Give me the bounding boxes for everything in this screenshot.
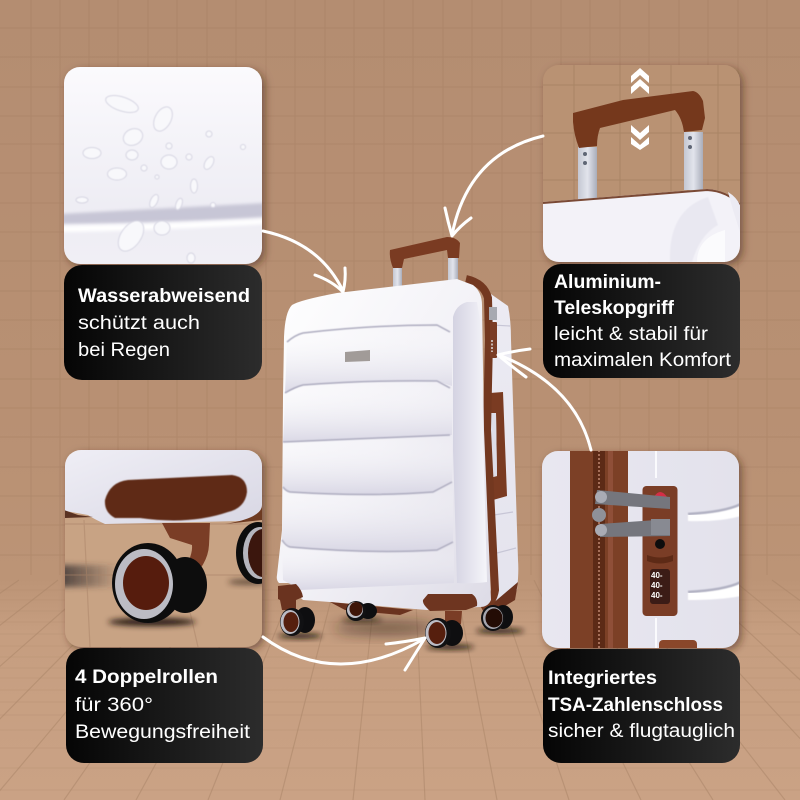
text box: aluminium-teleskopgriff: maximalen Komfort bbox=[554, 350, 732, 371]
text box: wasserabweisend: schützt auch bbox=[78, 313, 200, 334]
panel: tsa-zahlenschloss bbox=[542, 450, 741, 763]
photo: TSA combination lock: 40- bbox=[651, 571, 663, 580]
photo: TSA combination lock: 40- bbox=[651, 591, 663, 600]
text box: aluminium-teleskopgriff: leicht & stabil für bbox=[554, 324, 709, 345]
text box: 4 doppelrollen: für 360° bbox=[75, 695, 153, 716]
text box: 4 doppelrollen: Bewegungsfreiheit bbox=[75, 722, 251, 743]
icon: down chevrons bbox=[631, 125, 649, 150]
text box: wasserabweisend: bei Regen bbox=[78, 340, 170, 361]
back shell bbox=[486, 292, 518, 610]
back shell rib lines bbox=[492, 325, 516, 553]
brand badge bbox=[345, 350, 370, 362]
ground shadows bbox=[278, 618, 524, 650]
text box: tsa-zahlenschloss: Integriertes bbox=[548, 668, 657, 689]
text box: tsa-zahlenschloss: sicher & flugtauglich bbox=[548, 721, 735, 742]
photo: telescopic handle bbox=[540, 60, 745, 265]
telescopic handle bbox=[390, 237, 460, 287]
text box: wasserabweisend: Wasserabweisend bbox=[78, 286, 250, 307]
text box: 4 doppelrollen bbox=[66, 648, 263, 763]
TSA lock on suitcase bbox=[489, 307, 497, 358]
photo: water droplets on shell bbox=[60, 67, 265, 264]
arrow: water resistance to shell bbox=[263, 231, 345, 292]
icon: up chevrons bbox=[631, 68, 649, 94]
photo: TSA combination lock: 40- bbox=[651, 581, 663, 590]
text box: tsa-zahlenschloss: TSA-Zahlenschloss bbox=[548, 695, 723, 716]
wheel: rear middle bbox=[330, 601, 413, 621]
arrow: lock panel to suitcase lock bbox=[498, 349, 591, 450]
side carry handle bbox=[490, 392, 507, 500]
panel: aluminium-teleskopgriff bbox=[540, 60, 745, 378]
arrow: wheel panel to wheel bbox=[263, 637, 425, 670]
shell ribs bbox=[282, 325, 453, 551]
text box: aluminium-teleskopgriff: Aluminium- bbox=[554, 272, 661, 293]
text box: wasserabweisend bbox=[64, 265, 262, 380]
arrow: grip panel to handle bbox=[445, 136, 543, 236]
wheel: rear right bbox=[481, 605, 513, 631]
suitcase bbox=[277, 237, 524, 650]
front side facet bbox=[453, 302, 487, 583]
shell section shading bbox=[282, 327, 454, 590]
wheel: front left bbox=[278, 584, 315, 636]
wheel: front center bbox=[423, 594, 477, 648]
zipper band bbox=[466, 279, 495, 609]
rear right wheel bracket bbox=[485, 582, 518, 610]
text box: tsa-zahlenschloss bbox=[543, 649, 740, 763]
panel: 4 doppelrollen bbox=[60, 445, 280, 763]
photo: double wheel bbox=[60, 445, 280, 647]
text box: 4 doppelrollen: 4 Doppelrollen bbox=[75, 667, 218, 688]
text box: aluminium-teleskopgriff bbox=[543, 264, 740, 378]
text box: aluminium-teleskopgriff: Teleskopgriff bbox=[554, 298, 675, 319]
front shell bbox=[277, 279, 491, 610]
photo: TSA combination lock bbox=[542, 450, 741, 652]
panel: wasserabweisend bbox=[60, 67, 265, 380]
